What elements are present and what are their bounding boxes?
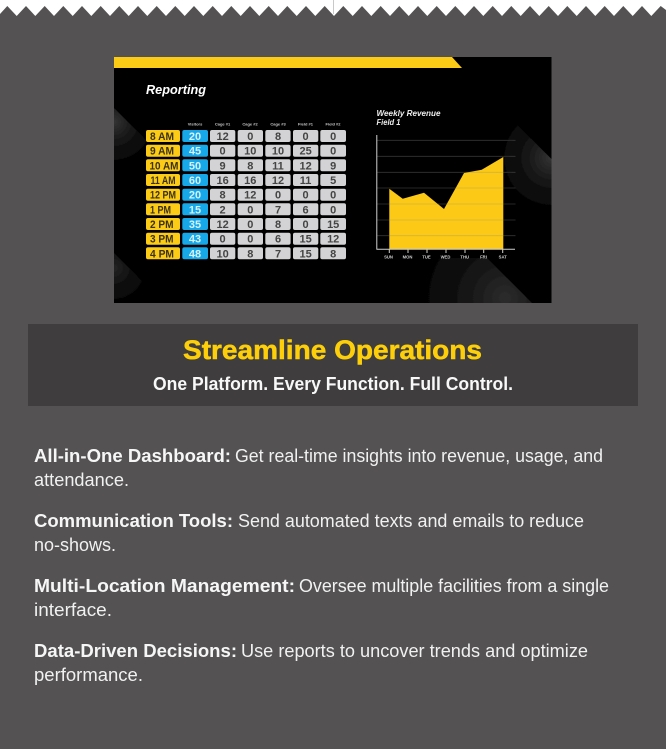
row: 8 AM: 0 <box>330 131 336 143</box>
row: 3 PM: 12 <box>327 234 339 246</box>
row: 2 PM: 0 <box>303 219 309 231</box>
row: 10 AM: 9 <box>330 160 336 172</box>
row: 8 AM: 8 AM <box>150 131 174 143</box>
row: 2 PM: 0 <box>247 219 253 231</box>
row: 4 PM: 48 <box>189 248 201 260</box>
chart title: Weekly Revenue Field 1: Field 1 <box>376 118 401 127</box>
row: 12 PM: 20 <box>189 190 201 202</box>
row: 8 AM: 0 <box>247 131 253 143</box>
text block: Data-Driven Decisions: performance. <box>34 665 143 685</box>
row: 3 PM <box>146 233 346 246</box>
row: 3 PM: 6 <box>275 234 281 246</box>
chart day labels <box>384 255 507 260</box>
row: 10 AM: 11 <box>272 160 284 172</box>
row: 3 PM: 43 <box>189 234 201 246</box>
row: 1 PM: 2 <box>220 204 226 216</box>
row: 4 PM <box>146 247 346 260</box>
row: 4 PM: 4 PM <box>150 248 174 260</box>
chart day labels: THU <box>460 255 469 260</box>
row: 1 PM <box>146 203 346 216</box>
text block: Communication Tools: no-shows. <box>34 535 116 555</box>
row: 2 PM <box>146 218 346 231</box>
row: 8 AM: 20 <box>189 131 201 143</box>
subtitle: One Platform. Every Function. Full Control. <box>153 374 513 394</box>
row: 1 PM: 0 <box>330 204 336 216</box>
row: 10 AM <box>146 159 346 172</box>
row: 1 PM: 15 <box>189 204 201 216</box>
row: 2 PM: 35 <box>189 219 201 231</box>
row: 10 AM: 10 AM <box>150 160 178 172</box>
row: 2 PM: 8 <box>275 219 281 231</box>
text block: Communication Tools: Communication Tools: <box>34 511 233 531</box>
row: 9 AM: 0 <box>330 146 336 158</box>
text block: Data-Driven Decisions <box>34 641 588 685</box>
column headers: Cage #3 <box>270 122 286 126</box>
row: 4 PM: 8 <box>330 248 336 260</box>
row: 3 PM: 0 <box>220 234 226 246</box>
row: 12 PM: 0 <box>330 190 336 202</box>
text block: All-in-One Dashboard: All-in-One Dashboard: <box>34 446 231 466</box>
chart title: Weekly Revenue Field 1 <box>376 109 441 127</box>
row: 12 PM: 12 PM <box>150 190 176 202</box>
column headers <box>188 122 341 126</box>
text block: All-in-One Dashboard: attendance. <box>34 470 129 490</box>
row: 8 AM <box>146 130 346 143</box>
row: 3 PM: 3 PM <box>150 234 174 246</box>
row: 10 AM: 50 <box>189 160 201 172</box>
row: 11 AM <box>146 174 346 187</box>
chart day labels: TUE <box>422 255 431 260</box>
row: 11 AM: 11 <box>300 175 311 187</box>
row: 11 AM: 5 <box>330 175 336 187</box>
heading: Reporting: Reporting <box>146 83 206 97</box>
column headers: Field #2 <box>326 122 341 126</box>
text block: Multi-Location Management: Multi-Location Management: <box>34 576 295 596</box>
chart day labels: WED <box>441 255 450 260</box>
column headers: Visitors <box>188 122 203 126</box>
row: 1 PM: 1 PM <box>150 204 171 216</box>
row: 3 PM: 0 <box>247 234 253 246</box>
row: 12 PM: 12 <box>244 190 256 202</box>
heading band <box>28 324 638 406</box>
row: 11 AM: 60 <box>189 175 201 187</box>
text block: Communication Tools <box>34 511 584 555</box>
text block: All-in-One Dashboard <box>34 446 603 490</box>
row: 10 AM: 8 <box>247 160 253 172</box>
row: 9 AM: 9 AM <box>150 146 174 158</box>
row: 8 AM: 8 <box>275 131 281 143</box>
text block: Multi-Location Management <box>34 576 609 620</box>
text block: Multi-Location Management: interface. <box>34 600 112 620</box>
row: 4 PM: 15 <box>299 248 312 260</box>
row: 9 AM: 45 <box>189 146 201 158</box>
row: 11 AM: 16 <box>244 175 256 187</box>
chart day labels: SAT <box>499 255 507 260</box>
row: 9 AM: 10 <box>244 146 256 158</box>
row: 2 PM: 2 PM <box>150 219 174 231</box>
row: 12 PM: 0 <box>303 190 309 202</box>
column headers: Cage #1 <box>215 122 231 126</box>
row: 2 PM: 15 <box>327 219 339 231</box>
column headers: Cage #2 <box>242 122 258 126</box>
row: 1 PM: 7 <box>275 204 281 216</box>
row: 2 PM: 12 <box>216 219 229 231</box>
chart day labels: MON <box>403 255 412 260</box>
row: 3 PM: 15 <box>299 234 312 246</box>
text block: Multi-Location Management: Oversee multiple facilities from a single <box>299 576 609 596</box>
row: 11 AM: 12 <box>272 175 284 187</box>
title: Streamline Operations: Streamline Operations <box>183 335 482 365</box>
row: 1 PM: 6 <box>303 204 309 216</box>
row: 9 AM: 10 <box>272 146 284 158</box>
text block: All-in-One Dashboard: Get real-time insights into revenue, usage, and <box>235 446 603 466</box>
text block: Data-Driven Decisions: Use reports to uncover trends and optimize <box>241 641 588 661</box>
text block: Data-Driven Decisions: Data-Driven Decisions: <box>34 641 237 661</box>
row: 11 AM: 16 <box>216 175 229 187</box>
row: 1 PM: 0 <box>247 204 253 216</box>
row: 12 PM: 8 <box>220 190 226 202</box>
torn zigzag top edge <box>0 0 666 17</box>
row: 10 AM: 12 <box>299 160 312 172</box>
column headers: Field #1 <box>298 122 314 126</box>
row: 4 PM: 8 <box>247 248 253 260</box>
row: 9 AM <box>146 145 346 158</box>
chart title: Weekly Revenue Field 1: Weekly Revenue <box>376 109 441 118</box>
row: 8 AM: 12 <box>216 131 229 143</box>
row: 4 PM: 10 <box>216 248 229 260</box>
row: 12 PM: 0 <box>275 190 281 202</box>
row: 12 PM <box>146 189 346 202</box>
row: 9 AM: 25 <box>299 146 312 158</box>
panel: reporting dashboard screenshot <box>114 57 552 303</box>
table: hourly reporting <box>146 122 346 260</box>
chart day labels: FRI <box>480 255 487 260</box>
text block: Communication Tools: Send automated texts and emails to reduce <box>238 511 584 531</box>
row: 4 PM: 7 <box>275 248 281 260</box>
chart day labels: SUN <box>384 255 393 260</box>
row: 10 AM: 9 <box>220 160 226 172</box>
yellow top bar <box>114 57 462 68</box>
row: 9 AM: 0 <box>220 146 226 158</box>
area chart: weekly revenue <box>376 135 516 260</box>
row: 8 AM: 0 <box>303 131 309 143</box>
row: 11 AM: 11 AM <box>150 175 176 187</box>
